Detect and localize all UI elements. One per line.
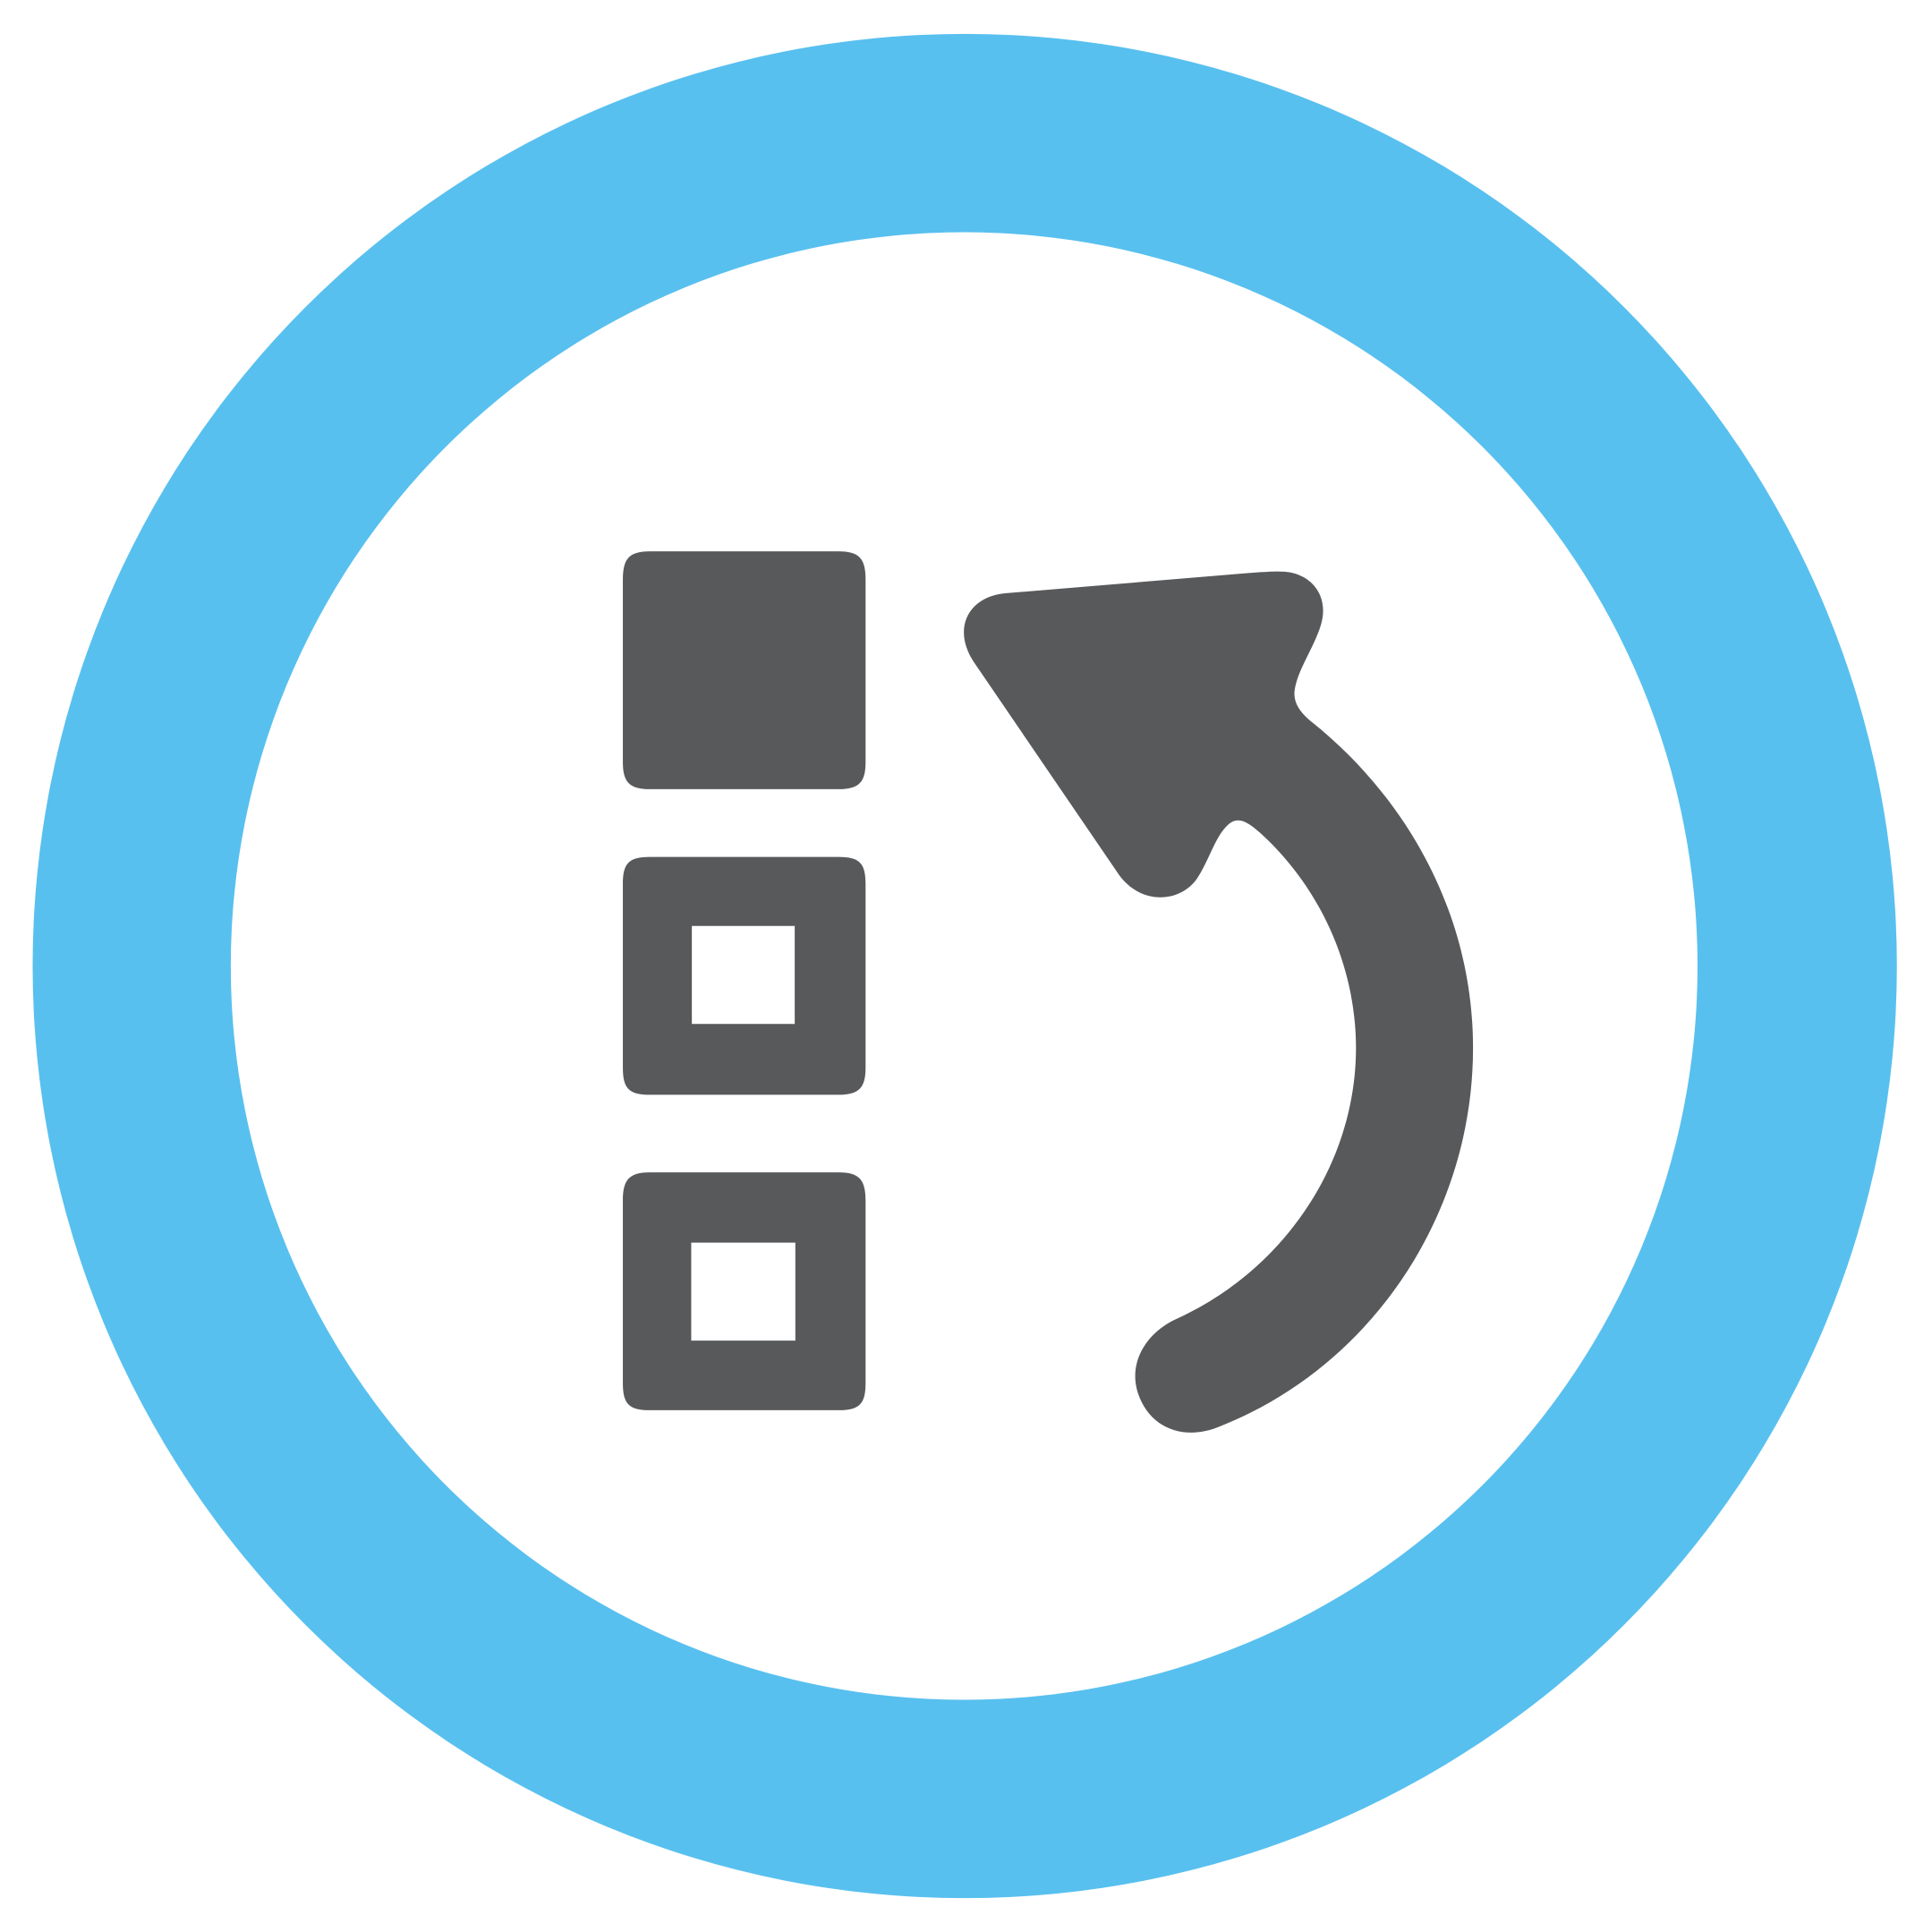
icon: filled square list item bbox=[623, 551, 865, 789]
icon: hollow square list item bottom bbox=[623, 1172, 865, 1410]
icon: hollow square list item middle bbox=[623, 857, 865, 1094]
arrow: curved return arrow bbox=[964, 572, 1473, 1433]
